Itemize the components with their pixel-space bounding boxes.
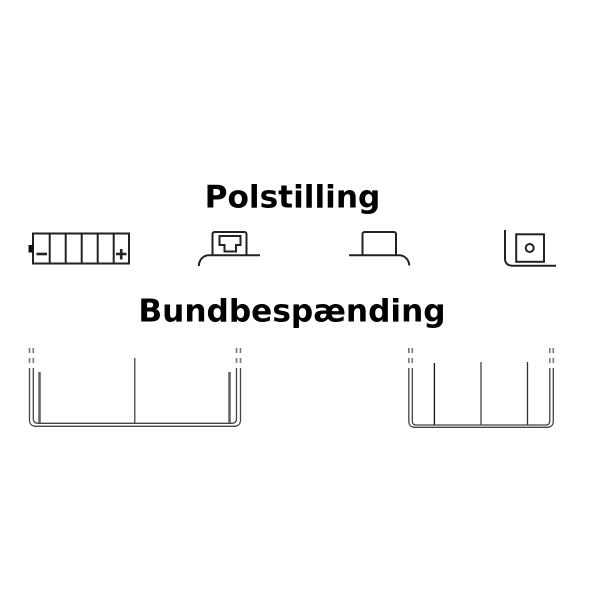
heading: Bundbespænding: Bundbespænding [138,293,446,329]
icon: plain terminal layout, right curve [349,232,409,266]
icon: battery top view with minus and plus terminals [28,234,129,264]
diagram: bottom hold-down tray, right [409,348,553,427]
icon: terminal layout with connector, left curve [199,232,260,266]
icon: corner terminal with square and circle [505,230,556,266]
heading: Polstilling: Polstilling [205,179,380,215]
diagram: bottom hold-down tray, left [30,348,240,426]
